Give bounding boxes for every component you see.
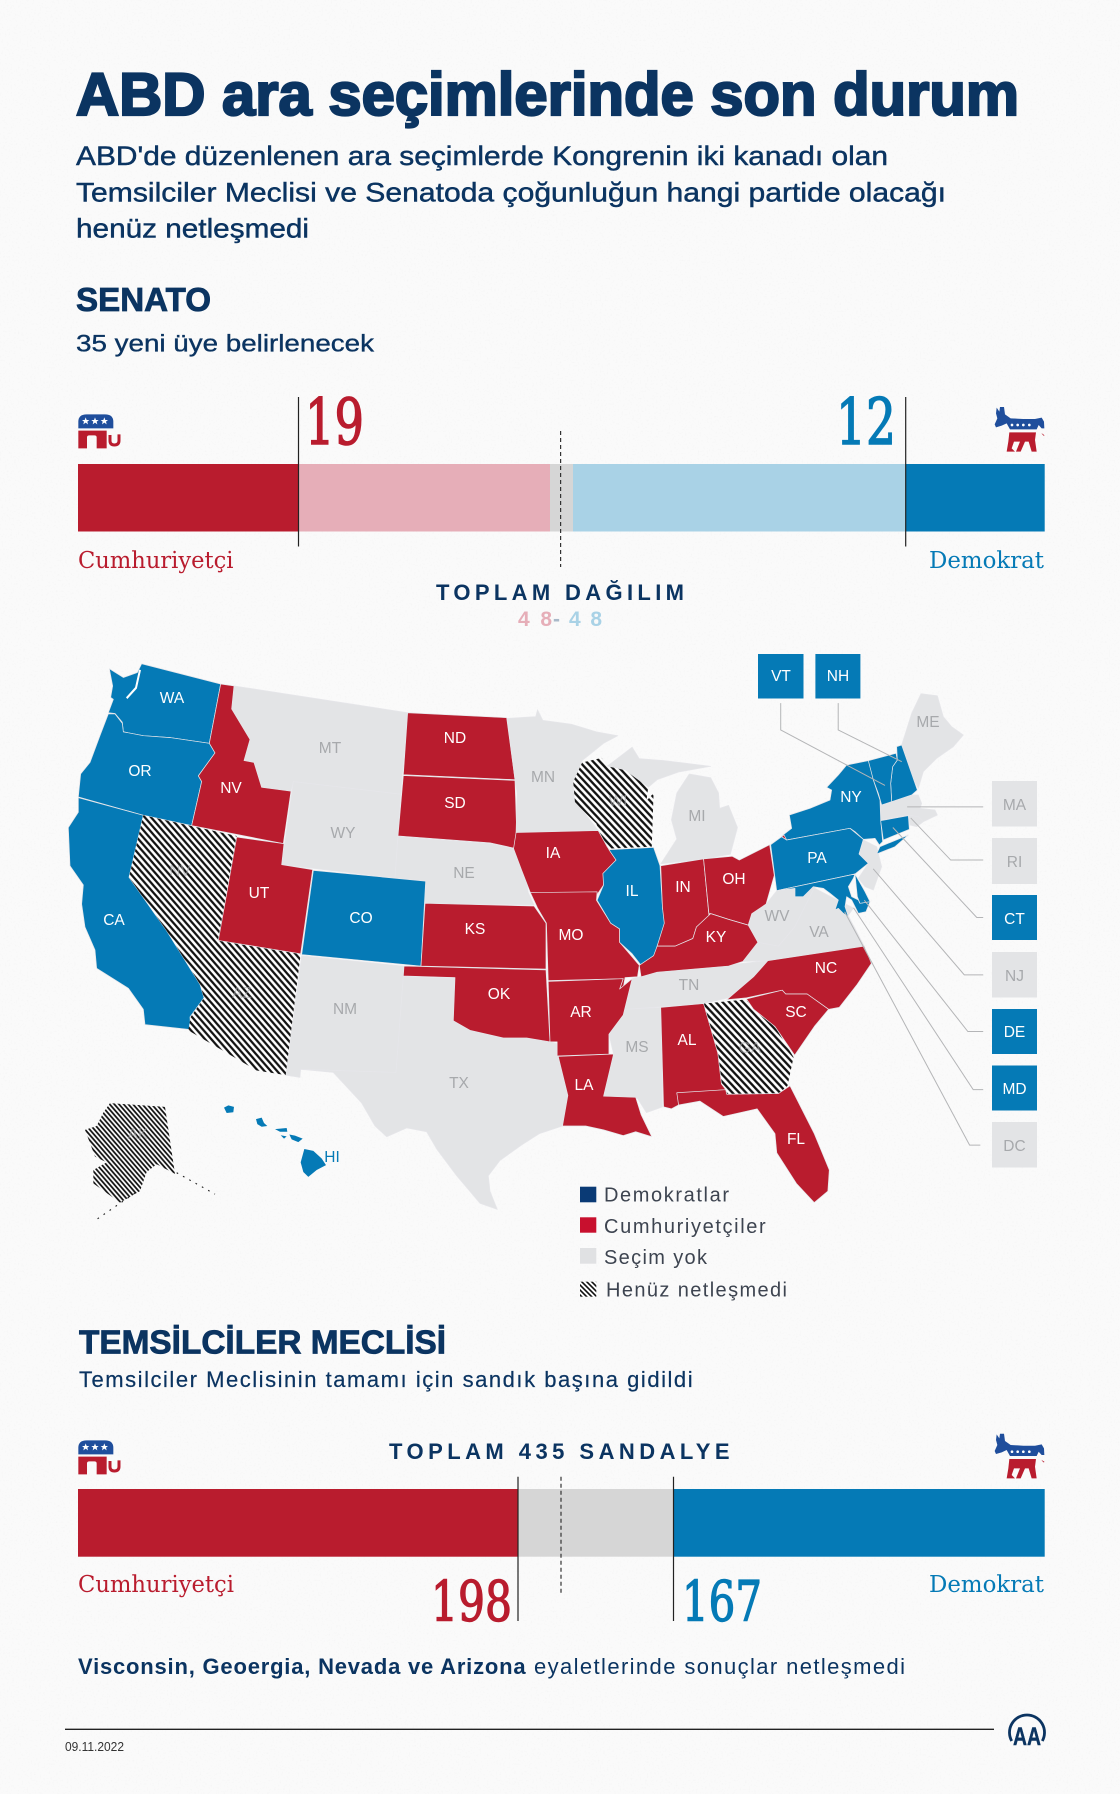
map state labels: MT [319, 740, 342, 757]
panel: senate bar chart [78, 386, 1045, 631]
subtitle text block: ABD'de düzenlenen ara seçimlerde Kongrenin iki kanadı olan [76, 141, 888, 171]
label: cumhuriyetçi: Cumhuriyetçi [78, 1572, 234, 1598]
box labels for small states: MA [1003, 797, 1027, 814]
map state labels: TN [679, 977, 699, 994]
value: democrat 167: 167 [682, 1570, 762, 1634]
value: 48-48: 48 [569, 608, 602, 631]
map state labels: VA [809, 924, 829, 941]
map state labels: LA [575, 1077, 594, 1094]
bar segment: undecided [518, 1489, 674, 1557]
map state labels: ME [916, 714, 940, 731]
map state labels: AL [678, 1032, 697, 1049]
bar segment: democrat [674, 1489, 1045, 1557]
box labels for small states [758, 654, 1037, 1168]
note text: eyaletlerinde sonuçlar netleşmedi [534, 1654, 905, 1679]
value: republican 198: 198 [431, 1570, 512, 1634]
map state labels: WY [331, 825, 355, 842]
map state labels: SC [785, 1004, 807, 1021]
map state labels: MS [625, 1039, 649, 1056]
value: democrat 12: 12 [836, 386, 896, 460]
map state labels: SD [444, 795, 466, 812]
map state labels: OR [128, 763, 152, 780]
map: leader lines [781, 703, 983, 1145]
map: western states [68, 664, 568, 1222]
icon: AA logo: AA [1013, 1723, 1041, 1751]
senate subheading: 35 yeni üye belirlenecek [76, 330, 375, 358]
box labels for small states: NH [827, 668, 849, 685]
legend [580, 1185, 787, 1302]
legend: Cumhuriyetçiler [604, 1216, 766, 1238]
legend: Henüz netleşmedi [606, 1280, 787, 1302]
bar segment: undecided [550, 464, 573, 532]
map state labels: IL [626, 883, 639, 900]
value: 48-48 [518, 608, 602, 631]
map state labels: HI [324, 1149, 340, 1166]
map state labels: WA [160, 690, 185, 707]
box labels for small states: CT [1004, 911, 1025, 928]
map: central and southern states [507, 710, 871, 1203]
map state labels: GA [739, 1040, 762, 1057]
map state labels: CO [349, 910, 373, 927]
icon: AA logo [1009, 1715, 1044, 1751]
map state labels [103, 690, 940, 1166]
map state labels: AK [128, 1126, 149, 1143]
value: republican 19: 19 [305, 386, 364, 460]
note text [78, 1654, 905, 1679]
map state labels: AR [570, 1004, 592, 1021]
map state labels: CA [103, 912, 125, 929]
map state labels: PA [807, 850, 827, 867]
map state labels: MI [688, 808, 706, 825]
map state labels: WI [609, 793, 627, 810]
map state labels: NY [840, 789, 862, 806]
icon: democrat donkey [995, 1434, 1045, 1478]
box labels for small states: DE [1004, 1024, 1025, 1041]
map state labels: IN [675, 879, 691, 896]
label: cumhuriyetçi: Cumhuriyetçi [78, 548, 234, 574]
map state labels: ND [444, 730, 466, 747]
icon: democrat donkey [995, 407, 1045, 452]
icon: republican elephant [78, 1440, 119, 1474]
box labels for small states: RI [1007, 854, 1022, 871]
panel: house bar chart [78, 1434, 1045, 1634]
value: 48-48: - [553, 608, 560, 631]
label: toplam dağılım: TOPLAM DAĞILIM [436, 580, 684, 605]
box labels for small states: VT [771, 668, 791, 685]
bar segment: democrat total [573, 464, 906, 532]
map state labels: KY [706, 929, 726, 946]
footer rule and date: 09.11.2022 [65, 1739, 124, 1754]
map state labels: OK [488, 986, 511, 1003]
map state labels: NV [220, 780, 242, 797]
house subheading: Temsilciler Meclisinin tamamı için sandık başına gidildi [79, 1367, 693, 1392]
map state labels: NC [815, 960, 837, 977]
heading: temsilciler meclisi: TEMSİLCİLER MECLİSİ [79, 1324, 446, 1361]
heading: senato: SENATO [76, 281, 211, 318]
map state labels: KS [465, 921, 485, 938]
title: ABD ara seçimlerinde son durum [76, 61, 1019, 128]
bar segment: democrat seats [906, 464, 1045, 532]
icon: republican elephant [78, 414, 119, 448]
map state labels: UT [249, 885, 270, 902]
map: northeastern states [771, 694, 963, 917]
map state labels: FL [787, 1131, 805, 1148]
map state labels: MO [559, 927, 583, 944]
map state labels: NV [169, 863, 191, 880]
box labels for small states: MD [1002, 1081, 1027, 1098]
subtitle text block: henüz netleşmedi [76, 214, 309, 244]
note text: Visconsin, Geoergia, Nevada ve Arizona [78, 1654, 526, 1679]
subtitle text block: Temsilciler Meclisi ve Senatoda çoğunluğun hangi partide olacağı [76, 178, 946, 208]
box labels for small states: DC [1003, 1138, 1026, 1155]
map state labels: IA [546, 845, 561, 862]
map state labels: NM [333, 1001, 357, 1018]
box labels for small states: NJ [1005, 968, 1024, 985]
value: 48-48: 48 [518, 608, 552, 631]
bar segment: republican total [298, 464, 550, 532]
map state labels: MN [531, 769, 555, 786]
subtitle text block [76, 141, 946, 244]
bar segment: republican [78, 1489, 518, 1557]
panel: us map [68, 654, 1037, 1222]
map state labels: NE [453, 865, 475, 882]
map state labels: OH [722, 871, 746, 888]
label: demokrat: Demokrat [929, 1572, 1045, 1598]
legend: Demokratlar [604, 1185, 729, 1207]
legend: Seçim yok [604, 1247, 708, 1269]
bar segment: republican seats [78, 464, 298, 532]
map state labels: WV [765, 908, 790, 925]
map state labels: AZ [232, 985, 252, 1002]
map state labels: TX [449, 1075, 470, 1092]
label: demokrat: Demokrat [929, 548, 1045, 574]
label: toplam 435 sandalye: TOPLAM 435 SANDALYE [389, 1439, 730, 1464]
